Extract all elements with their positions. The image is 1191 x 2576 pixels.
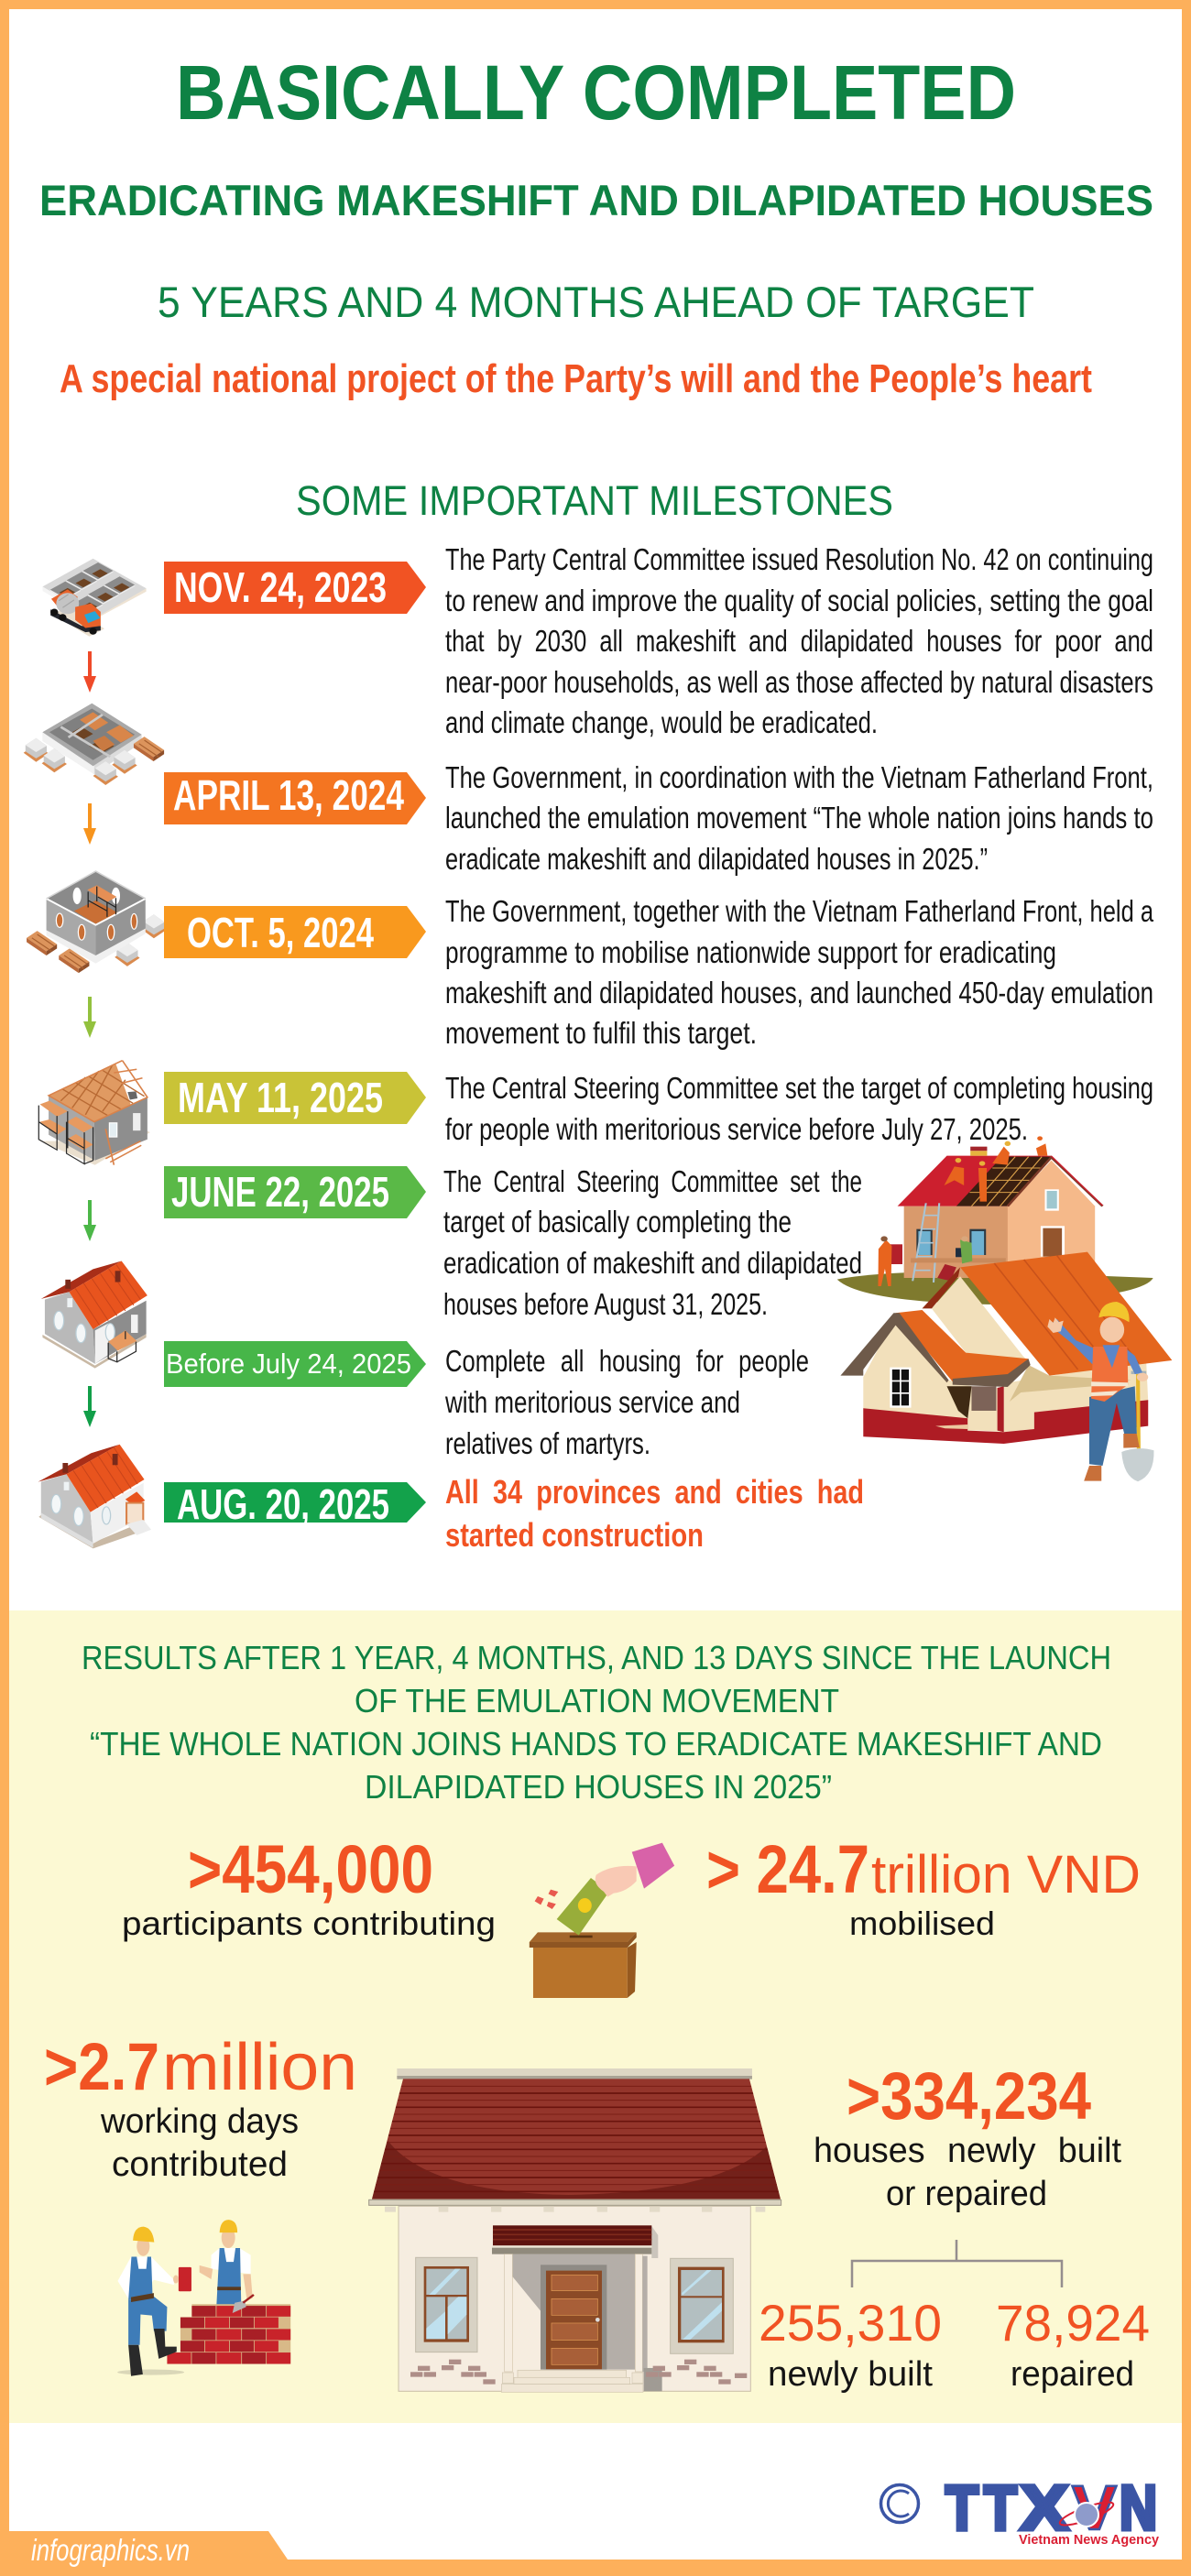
arrow: green: [83, 1200, 96, 1241]
icon: finished house with porch frame: [41, 1261, 148, 1369]
arrow: dark green: [83, 1386, 96, 1427]
stat: funds mobilised: trillion VND: [871, 1845, 1141, 1905]
connector bracket: [852, 2240, 1062, 2287]
text: June 2025 milestone: houses before August 31, 2025.: [443, 1287, 768, 1321]
stat: working days: working days: [100, 2102, 299, 2141]
stat: funds mobilised: > 24.7: [706, 1831, 869, 1907]
text: October 2024 milestone: movement to fulfil this target.: [445, 1016, 757, 1050]
logo: TTXVN: [945, 2472, 1159, 2548]
illustration: house under construction and worker: [837, 1136, 1172, 1481]
text: August 2025 milestone: [445, 1473, 864, 1554]
icon: builders and brick wall: [117, 2220, 290, 2376]
results heading: DILAPIDATED HOUSES IN 2025”: [365, 1768, 832, 1806]
front house: [840, 1252, 1172, 1444]
stat: working days: contributed: [112, 2145, 288, 2184]
icon: finished house: [38, 1445, 151, 1548]
stat: newly built: newly built: [768, 2355, 933, 2394]
bricks: [167, 2304, 290, 2364]
footer tag: infographics.vn: infographics.vn: [31, 2533, 190, 2567]
icon: house walls: [27, 870, 167, 973]
date badge: Before July 24, 2025: [164, 1341, 426, 1387]
illustration: finished house: [366, 2068, 794, 2392]
right builder: [200, 2220, 253, 2305]
icon: foundation and concrete truck: [42, 559, 147, 637]
text: August 2025 milestone: started construction: [445, 1516, 704, 1554]
stat: participants: [122, 1831, 496, 1942]
date badge: Nov. 24, 2023: NOV. 24, 2023: [174, 563, 387, 611]
logo: TTXVN: T: [984, 2472, 1017, 2543]
text: June 2025 milestone: The Central Steering Committee set the: [443, 1164, 862, 1198]
text: May 2025 milestone: [445, 1071, 1153, 1146]
text: May 2025 milestone: for people with meritorious service before July 27, 2025.: [445, 1112, 1028, 1146]
ground workers: [878, 1236, 972, 1286]
text: July 2025 milestone: [444, 1344, 809, 1460]
stat: newly built: 255,310: [759, 2294, 942, 2352]
stat: participants: participants contributing: [122, 1905, 496, 1942]
results heading: OF THE EMULATION MOVEMENT: [355, 1682, 839, 1719]
stat: funds mobilised: [706, 1831, 1141, 1942]
text: April 2024 milestone: [445, 760, 1153, 876]
left window: [416, 2257, 477, 2352]
text: August 2025 milestone: All 34 provinces and cities had: [445, 1473, 864, 1511]
stat: working days: million: [162, 2031, 357, 2104]
text: June 2025 milestone: eradication of makeshift and dilapidated: [443, 1246, 862, 1280]
arrow: orange: [83, 803, 96, 845]
text: November 2023 milestone: [445, 542, 1153, 739]
ground: [837, 1272, 1153, 1304]
title: BASICALLY COMPLETED: [176, 49, 1016, 136]
logo: TTXVN: T: [945, 2472, 978, 2543]
icon: house with roof frame: [38, 1061, 150, 1165]
stat: houses built or repaired: houses newly built: [814, 2132, 1121, 2170]
stat: working days: [44, 2030, 357, 2184]
date badge: Aug. 20, 2025: AUG. 20, 2025: [177, 1480, 389, 1528]
right window: [671, 2258, 733, 2353]
results heading: “THE WHOLE NATION JOINS HANDS TO ERADICATE MAKESHIFT AND: [90, 1725, 1102, 1763]
text: April 2024 milestone: eradicate makeshift and dilapidated houses in 2025.”: [445, 842, 988, 876]
stat: repaired: [996, 2294, 1150, 2394]
stat: houses built or repaired: >334,234: [847, 2059, 1091, 2134]
roof workers: [945, 1136, 1047, 1202]
text: November 2023 milestone: and climate change, would be eradicated.: [445, 705, 878, 739]
stat: repaired: repaired: [1011, 2355, 1134, 2394]
stat: participants: >454,000: [188, 1831, 433, 1907]
footer tag: infographics.vn: [9, 2531, 288, 2567]
panel: results: [9, 1610, 1182, 2423]
results heading: RESULTS AFTER 1 YEAR, 4 MONTHS, AND 13 DAYS SINCE THE LAUNCH: [82, 1639, 1111, 1676]
stat: funds mobilised: mobilised: [849, 1905, 995, 1942]
date badge: Before July 24, 2025: Before July 24, 2025: [166, 1348, 411, 1380]
text: October 2024 milestone: [445, 894, 1153, 1050]
logo: TTXVN: V: [1072, 2472, 1117, 2543]
stat: working days: >2.7: [44, 2030, 159, 2104]
section heading: milestones: SOME IMPORTANT MILESTONES: [296, 477, 893, 524]
icon: donation box: [530, 1843, 674, 1998]
left builder: [118, 2227, 191, 2376]
logo: TTXVN: Vietnam News Agency: [1019, 2533, 1159, 2548]
date badge: May 11, 2025: MAY 11, 2025: [178, 1074, 383, 1121]
logo: TTXVN: X: [1021, 2472, 1068, 2543]
back house: [898, 1147, 1102, 1283]
stat: newly built: [759, 2294, 942, 2394]
stat: houses built or repaired: [814, 2059, 1121, 2213]
date badge: Oct. 5, 2024: OCT. 5, 2024: [187, 909, 374, 956]
icon: foundation with materials: [24, 704, 164, 785]
copyright mark: [881, 2484, 918, 2523]
target line: 5 YEARS AND 4 MONTHS AHEAD OF TARGET: [158, 278, 1034, 326]
text: July 2025 milestone: relatives of martyrs.: [445, 1426, 650, 1460]
date badge: June 22, 2025: JUNE 22, 2025: [171, 1168, 389, 1216]
stat: houses built or repaired: or repaired: [886, 2175, 1047, 2213]
subtitle: ERADICATING MAKESHIFT AND DILAPIDATED HOUSES: [39, 176, 1153, 224]
logo: TTXVN: N: [1120, 2472, 1157, 2543]
worker with shovel: [1047, 1302, 1153, 1481]
results heading: [82, 1639, 1111, 1806]
arrow: light green: [83, 997, 96, 1038]
date badge: April 13, 2024: APRIL 13, 2024: [173, 771, 404, 819]
text: June 2025 milestone: [443, 1164, 862, 1321]
text: July 2025 milestone: with meritorious service and: [444, 1385, 740, 1419]
arrow: red: [83, 651, 96, 693]
text: June 2025 milestone: target of basically completing the: [443, 1205, 792, 1239]
text: July 2025 milestone: Complete all housing for people: [445, 1344, 809, 1378]
stat: repaired: 78,924: [996, 2294, 1150, 2352]
